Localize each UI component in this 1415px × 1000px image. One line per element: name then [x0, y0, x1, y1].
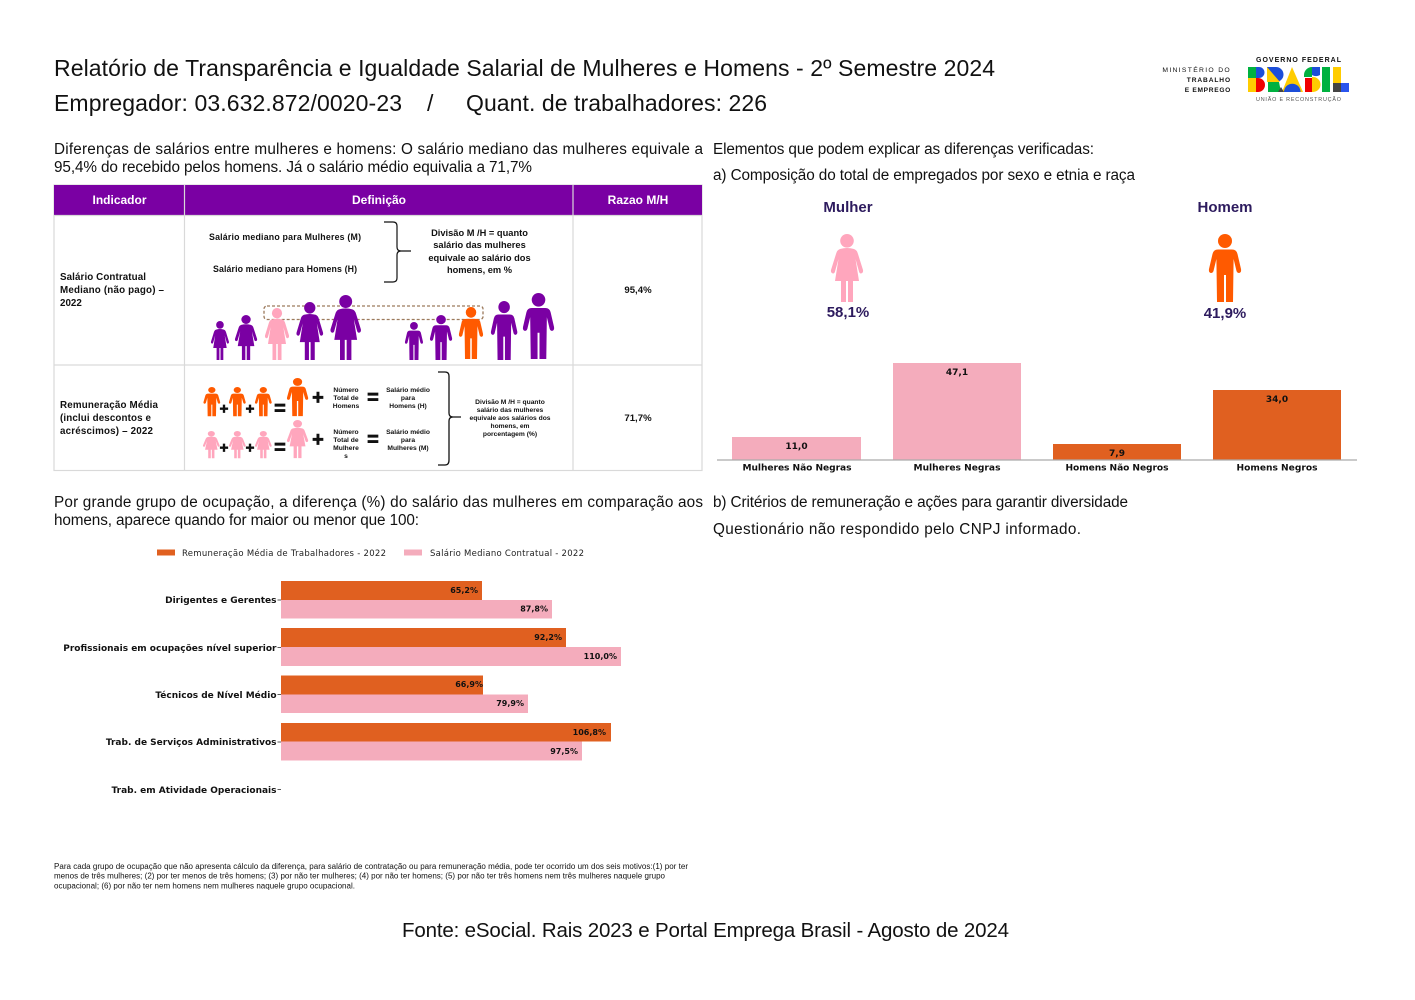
row label: remuneração média: acréscimos) – 2022	[60, 426, 154, 437]
panel: man share: Homem	[1197, 199, 1253, 216]
men average text: Homens (H)	[389, 403, 427, 410]
bar chart: composition by sex and race: Homens Negros	[1236, 464, 1318, 474]
footnote: Para cada grupo de ocupação que não apresenta cálculo da diferença, para salário de contratação ou para remuneração média, pode ter ocorrido um dos seis motivos:(1) por ter	[54, 862, 688, 871]
bar chart: occupation groups: Técnicos de Nível Médio	[155, 690, 276, 701]
bar chart: composition by sex and race	[717, 363, 1357, 474]
table header	[92, 193, 668, 207]
women average text: para	[401, 437, 415, 444]
men average text: Homens	[333, 403, 359, 410]
median highlight dashed box	[264, 306, 483, 320]
right heading: explaining elements: Elementos que podem explicar as diferenças verificadas:	[713, 141, 1094, 158]
source line: Fonte: eSocial. Rais 2023 e Portal Emprega Brasil - Agosto de 2024	[402, 919, 1009, 942]
logo: governo federal brasil: UNIÃO E RECONSTRUÇÃO	[1256, 96, 1341, 103]
panel: woman share: Mulher	[823, 199, 873, 216]
logo: ministério do trabalho e emprego	[1162, 65, 1231, 94]
title: Relatório de Transparência e Igualdade Salarial de Mulheres e Homens - 2º Semestre 2024	[54, 55, 995, 81]
icons: women average equation: +	[312, 429, 324, 451]
median definition text: equivale ao salário dos	[428, 253, 531, 263]
row label: remuneração média	[60, 400, 159, 437]
average division text: porcentagem (%)	[483, 431, 537, 438]
title: Empregador: 03.632.872/0020-23	[54, 90, 402, 116]
bar chart: occupation groups: 87,8%	[520, 604, 548, 614]
row label: salário contratual mediano: Salário Contratual	[60, 272, 146, 283]
average division text: Divisão M /H = quanto	[475, 399, 545, 406]
median definition text	[209, 228, 531, 275]
bar chart: composition by sex and race: 34,0	[1266, 395, 1288, 405]
median definition text: Salário mediano para Homens (H)	[213, 264, 357, 274]
bar chart: composition by sex and race: 47,1	[946, 368, 968, 378]
icons: men average equation: +	[220, 400, 229, 418]
panel: man share	[1197, 199, 1253, 322]
panel: woman share: 58,1%	[827, 304, 869, 321]
women average text: Mulheres (M)	[387, 445, 429, 452]
icons: men average equation: =	[367, 387, 379, 409]
value 95,4%: 95,4%	[624, 285, 652, 296]
men average text: Total de	[333, 395, 359, 402]
bar chart: occupation groups: Dirigentes e Gerentes	[165, 596, 276, 606]
icons: women average equation: +	[246, 440, 255, 456]
men average text	[333, 387, 430, 410]
bar chart: occupation groups: 106,8%	[573, 728, 606, 737]
intro text: salary differences: 95,4% do recebido pelos homens. Já o salário médio equivalia a 71,7%	[54, 159, 532, 176]
intro text: salary differences: Diferenças de salários entre mulheres e homens: O salário mediano das mulheres equivale a	[54, 141, 703, 158]
occupation text: Por grande grupo de ocupação, a diferença (%) do salário das mulheres em comparação aos	[54, 494, 703, 511]
row label: remuneração média: Remuneração Média	[60, 400, 159, 411]
legend	[157, 548, 584, 559]
women average text	[333, 429, 430, 460]
bar chart: occupation groups: 110,0%	[584, 652, 617, 661]
bar chart: composition by sex and race: 11,0	[785, 442, 808, 452]
brace: median	[384, 222, 411, 282]
men average text: Número	[333, 387, 359, 394]
title: /	[427, 90, 434, 116]
women average text: Salário médio	[386, 429, 430, 436]
women average text: s	[344, 453, 348, 460]
bar chart: occupation groups: 65,2%	[450, 586, 478, 595]
bar chart: composition by sex and race: Mulheres Negras	[914, 464, 1000, 474]
table header: Indicador	[92, 193, 147, 207]
bar chart: composition by sex and race: Homens Não Negros	[1066, 464, 1168, 474]
logo: governo federal brasil	[1248, 57, 1349, 103]
women average text: Mulhere	[333, 445, 359, 452]
row label: salário contratual mediano	[60, 272, 165, 309]
icons: men average equation	[203, 378, 379, 420]
men average text: Salário médio	[386, 387, 430, 394]
section b text: Questionário não respondido pelo CNPJ informado.	[713, 521, 1081, 538]
panel: woman share	[823, 199, 873, 321]
women average text: Total de	[333, 437, 359, 444]
row label: salário contratual mediano: 2022	[60, 298, 82, 309]
women average text: Número	[333, 429, 359, 436]
bar chart: occupation groups: 92,2%	[534, 633, 562, 642]
bar chart: occupation groups: Trab. de Serviços Administrativos	[106, 738, 276, 748]
icons: men average equation: =	[274, 398, 286, 420]
title	[54, 55, 995, 116]
title: Quant. de trabalhadores: 226	[466, 90, 767, 116]
logo: ministério do trabalho e emprego: MINISTÉRIO DO	[1162, 65, 1231, 74]
table header: Definição	[352, 193, 406, 207]
men average text: para	[401, 395, 415, 402]
logo: ministério do trabalho e emprego: E EMPREGO	[1185, 87, 1231, 94]
median definition text: salário das mulheres	[433, 240, 526, 250]
average division text	[469, 399, 551, 438]
intro text: salary differences	[54, 141, 703, 176]
bar chart: occupation groups: 79,9%	[496, 699, 524, 708]
row label: remuneração média: (inclui descontos e	[60, 413, 152, 424]
median definition text: Salário mediano para Mulheres (M)	[209, 232, 361, 242]
bar chart: composition by sex and race: Mulheres Não Negras	[742, 464, 852, 474]
average division text: homens, em	[490, 423, 530, 430]
legend: Remuneração Média de Trabalhadores - 2022	[182, 548, 386, 559]
median definition text: Divisão M /H = quanto	[431, 228, 528, 238]
brace: average	[438, 372, 461, 465]
panel: man share: 41,9%	[1204, 305, 1246, 322]
icons: women row by height	[211, 295, 361, 360]
logo: ministério do trabalho e emprego: TRABALHO	[1187, 77, 1231, 84]
icons: men row by height	[405, 293, 554, 360]
icons: women average equation	[203, 420, 379, 459]
bar chart: occupation groups: 97,5%	[550, 747, 578, 756]
table header: Razao M/H	[608, 193, 668, 207]
occupation text	[54, 494, 703, 529]
value 71,7%: 71,7%	[624, 413, 652, 424]
right heading: explaining elements	[713, 141, 1135, 184]
average division text: equivale aos salários dos	[469, 415, 551, 422]
icons: women average equation: =	[367, 429, 379, 451]
icons: men average equation: +	[312, 387, 324, 409]
panel: indicator table	[54, 185, 702, 470]
legend: Salário Mediano Contratual - 2022	[430, 549, 584, 559]
section b text: b) Critérios de remuneração e ações para garantir diversidade	[713, 494, 1128, 511]
row label: salário contratual mediano: Mediano (não pago) –	[60, 285, 165, 296]
occupation text: homens, aparece quando for maior ou menor que 100:	[54, 512, 419, 529]
bar chart: composition by sex and race: 7,9	[1109, 449, 1125, 459]
logo: governo federal brasil: GOVERNO FEDERAL	[1256, 57, 1342, 64]
footnote	[54, 862, 688, 890]
icons: women average equation: =	[274, 437, 286, 459]
icons: men average equation: +	[246, 400, 255, 418]
median definition text: homens, em %	[447, 265, 513, 275]
footnote: ocupacional; (6) por não ter nem homens nem mulheres naquele grupo ocupacional.	[54, 882, 355, 890]
bar chart: occupation groups: Trab. em Atividade Operacionais	[111, 786, 276, 796]
average division text: salário das mulheres	[477, 407, 544, 414]
bar chart: occupation groups: 66,9%	[455, 680, 483, 689]
icons: women average equation: +	[220, 440, 229, 456]
section b text	[713, 494, 1128, 538]
bar chart: occupation groups: Profissionais em ocupações nível superior	[63, 644, 277, 654]
right heading: explaining elements: a) Composição do total de empregados por sexo e etnia e raça	[713, 167, 1135, 184]
bar chart: occupation groups	[63, 581, 621, 796]
footnote: menos de três mulheres; (2) por ter menos de três homens; (3) por não ter mulheres; (4) por não ter homens; (5) por não ter três homens nem três mulheres naquele grupo	[54, 872, 666, 880]
